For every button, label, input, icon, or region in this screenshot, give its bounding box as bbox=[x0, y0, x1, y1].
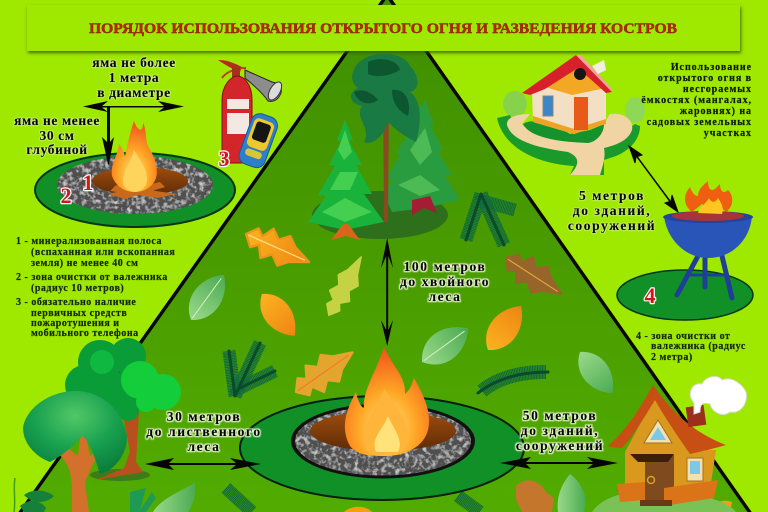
arrow: 30 metres bbox=[145, 458, 261, 470]
label: 30 metres: леса bbox=[187, 439, 221, 454]
label: 50 metres: 50 метров bbox=[523, 408, 597, 423]
legend: left notes: 2 - зона очистки от валежника bbox=[16, 272, 168, 283]
label: 30 metres bbox=[146, 409, 262, 454]
legend: left notes: мобильного телефона bbox=[31, 328, 139, 339]
bottom left plant bbox=[14, 478, 54, 512]
label: pit depth bbox=[14, 113, 100, 157]
small fire pit diagram bbox=[35, 121, 235, 227]
bottom pine bbox=[226, 488, 480, 512]
label: open fire in containers: участках bbox=[704, 128, 752, 139]
label: pit diameter: в диаметре bbox=[97, 85, 171, 100]
label: pit depth: яма не менее bbox=[14, 113, 100, 128]
legend: right note: валежника (радиус bbox=[651, 341, 746, 352]
bottom green leaf bbox=[558, 474, 585, 512]
label: open fire in containers: несгораемых bbox=[683, 84, 752, 95]
label: 100 metres: до хвойного bbox=[400, 274, 490, 289]
label: open fire in containers: открытого огня в bbox=[658, 73, 752, 84]
pine branch bbox=[229, 343, 275, 396]
deciduous trees bbox=[23, 338, 181, 512]
label: 5 metres bbox=[568, 188, 656, 233]
arrow: pit diameter bbox=[83, 101, 184, 112]
green leaf bbox=[569, 344, 623, 402]
title: ПОРЯДОК ИСПОЛЬЗОВАНИЯ ОТКРЫТОГО ОГНЯ И РАЗВЕДЕНИЯ КОСТРОВ bbox=[89, 21, 677, 37]
arrow: pit depth bbox=[102, 106, 114, 166]
legend: left notes: (радиус 10 метров) bbox=[31, 283, 124, 294]
label: 50 metres bbox=[516, 408, 604, 453]
number 4: 4 bbox=[644, 283, 656, 308]
legend: left notes: пожаротушения и bbox=[31, 318, 120, 329]
label: open fire in containers: жаровнях) на bbox=[680, 106, 752, 117]
legend: right note bbox=[636, 331, 746, 363]
smoke cloud bbox=[690, 377, 746, 414]
front tree crown bbox=[23, 391, 127, 474]
pine branch bbox=[466, 194, 515, 245]
fir left bbox=[308, 120, 384, 230]
label: pit depth: глубиной bbox=[26, 142, 88, 157]
label: open fire in containers bbox=[641, 62, 752, 139]
orange leaf bbox=[477, 298, 532, 358]
icon: fire extinguisher bbox=[218, 60, 284, 163]
back tree trunk bbox=[96, 412, 143, 480]
fallen leaves and branches bbox=[130, 194, 732, 512]
green leaf bbox=[179, 266, 235, 328]
label: pit depth: 30 см bbox=[39, 128, 75, 143]
number 1: 1 bbox=[82, 170, 94, 195]
bottom green leaf bbox=[153, 483, 195, 512]
label: pit diameter: яма не более bbox=[92, 55, 176, 70]
brown oak leaf bbox=[498, 245, 570, 307]
icon: large flame bbox=[345, 347, 429, 456]
legend: left notes: (вспаханная или вскопанная bbox=[31, 247, 175, 258]
yellow fern leaf bbox=[319, 252, 371, 320]
legend: left notes bbox=[16, 236, 175, 339]
label: open fire in containers: ёмкостях (мангалах, bbox=[641, 95, 752, 106]
icon: cottage on island bbox=[497, 55, 645, 175]
legend: left notes: 3 - обязательно наличие bbox=[16, 297, 136, 308]
conifer trees bbox=[308, 54, 460, 240]
number 3: 3 bbox=[218, 146, 230, 171]
label: 100 metres bbox=[400, 259, 490, 304]
green leaf bbox=[413, 316, 477, 374]
legend: left notes: первичных средств bbox=[31, 308, 127, 319]
label: 50 metres: до зданий, bbox=[521, 423, 599, 438]
legend: left notes: 1 - минерализованная полоса bbox=[16, 236, 162, 247]
arrow: 50 metres bbox=[500, 457, 618, 469]
arrow: 5 metres bbox=[629, 146, 678, 212]
pine twig bbox=[478, 372, 548, 393]
title banner bbox=[27, 5, 740, 51]
legend: right note: 2 метра) bbox=[651, 352, 693, 363]
label: open fire in containers: садовых земельных bbox=[647, 117, 752, 128]
legend: right note: 4 - зона очистки от bbox=[636, 331, 730, 342]
orange leaf bbox=[251, 286, 305, 344]
label: 5 metres: до зданий, bbox=[573, 203, 651, 218]
front tree trunk bbox=[56, 436, 102, 512]
pine trunk bbox=[383, 100, 389, 222]
back tree crown bbox=[65, 338, 155, 421]
label: pit diameter: 1 метра bbox=[109, 70, 159, 85]
label: open fire in containers: Использование bbox=[671, 62, 752, 73]
fir right bbox=[384, 100, 460, 212]
label: 30 metres: 30 метров bbox=[167, 409, 241, 424]
label: 50 metres: сооружений bbox=[516, 438, 604, 453]
arrow: 100 metres bbox=[381, 238, 393, 346]
icon: grill bbox=[663, 181, 753, 298]
label: 5 metres: сооружений bbox=[568, 218, 656, 233]
label: 100 metres: леса bbox=[428, 289, 462, 304]
bottom brown oak bbox=[516, 480, 554, 512]
bottom green sprout bbox=[130, 488, 156, 512]
bottom orange leaf bbox=[344, 501, 732, 512]
icon: mobile phone bbox=[237, 111, 280, 170]
label: 30 metres: до лиственного bbox=[146, 424, 262, 439]
large fire ring bbox=[240, 396, 524, 500]
orange oak leaf bbox=[239, 219, 316, 277]
label: pit diameter bbox=[92, 55, 176, 100]
label: 100 metres: 100 метров bbox=[404, 259, 486, 274]
small grass zone bbox=[617, 270, 753, 320]
icon: brick house bbox=[592, 385, 736, 512]
label: 5 metres: 5 метров bbox=[579, 188, 645, 203]
number 2: 2 bbox=[60, 183, 72, 208]
legend: left notes: земля) не менее 40 см bbox=[31, 258, 138, 269]
orange oak leaf bbox=[287, 339, 362, 405]
